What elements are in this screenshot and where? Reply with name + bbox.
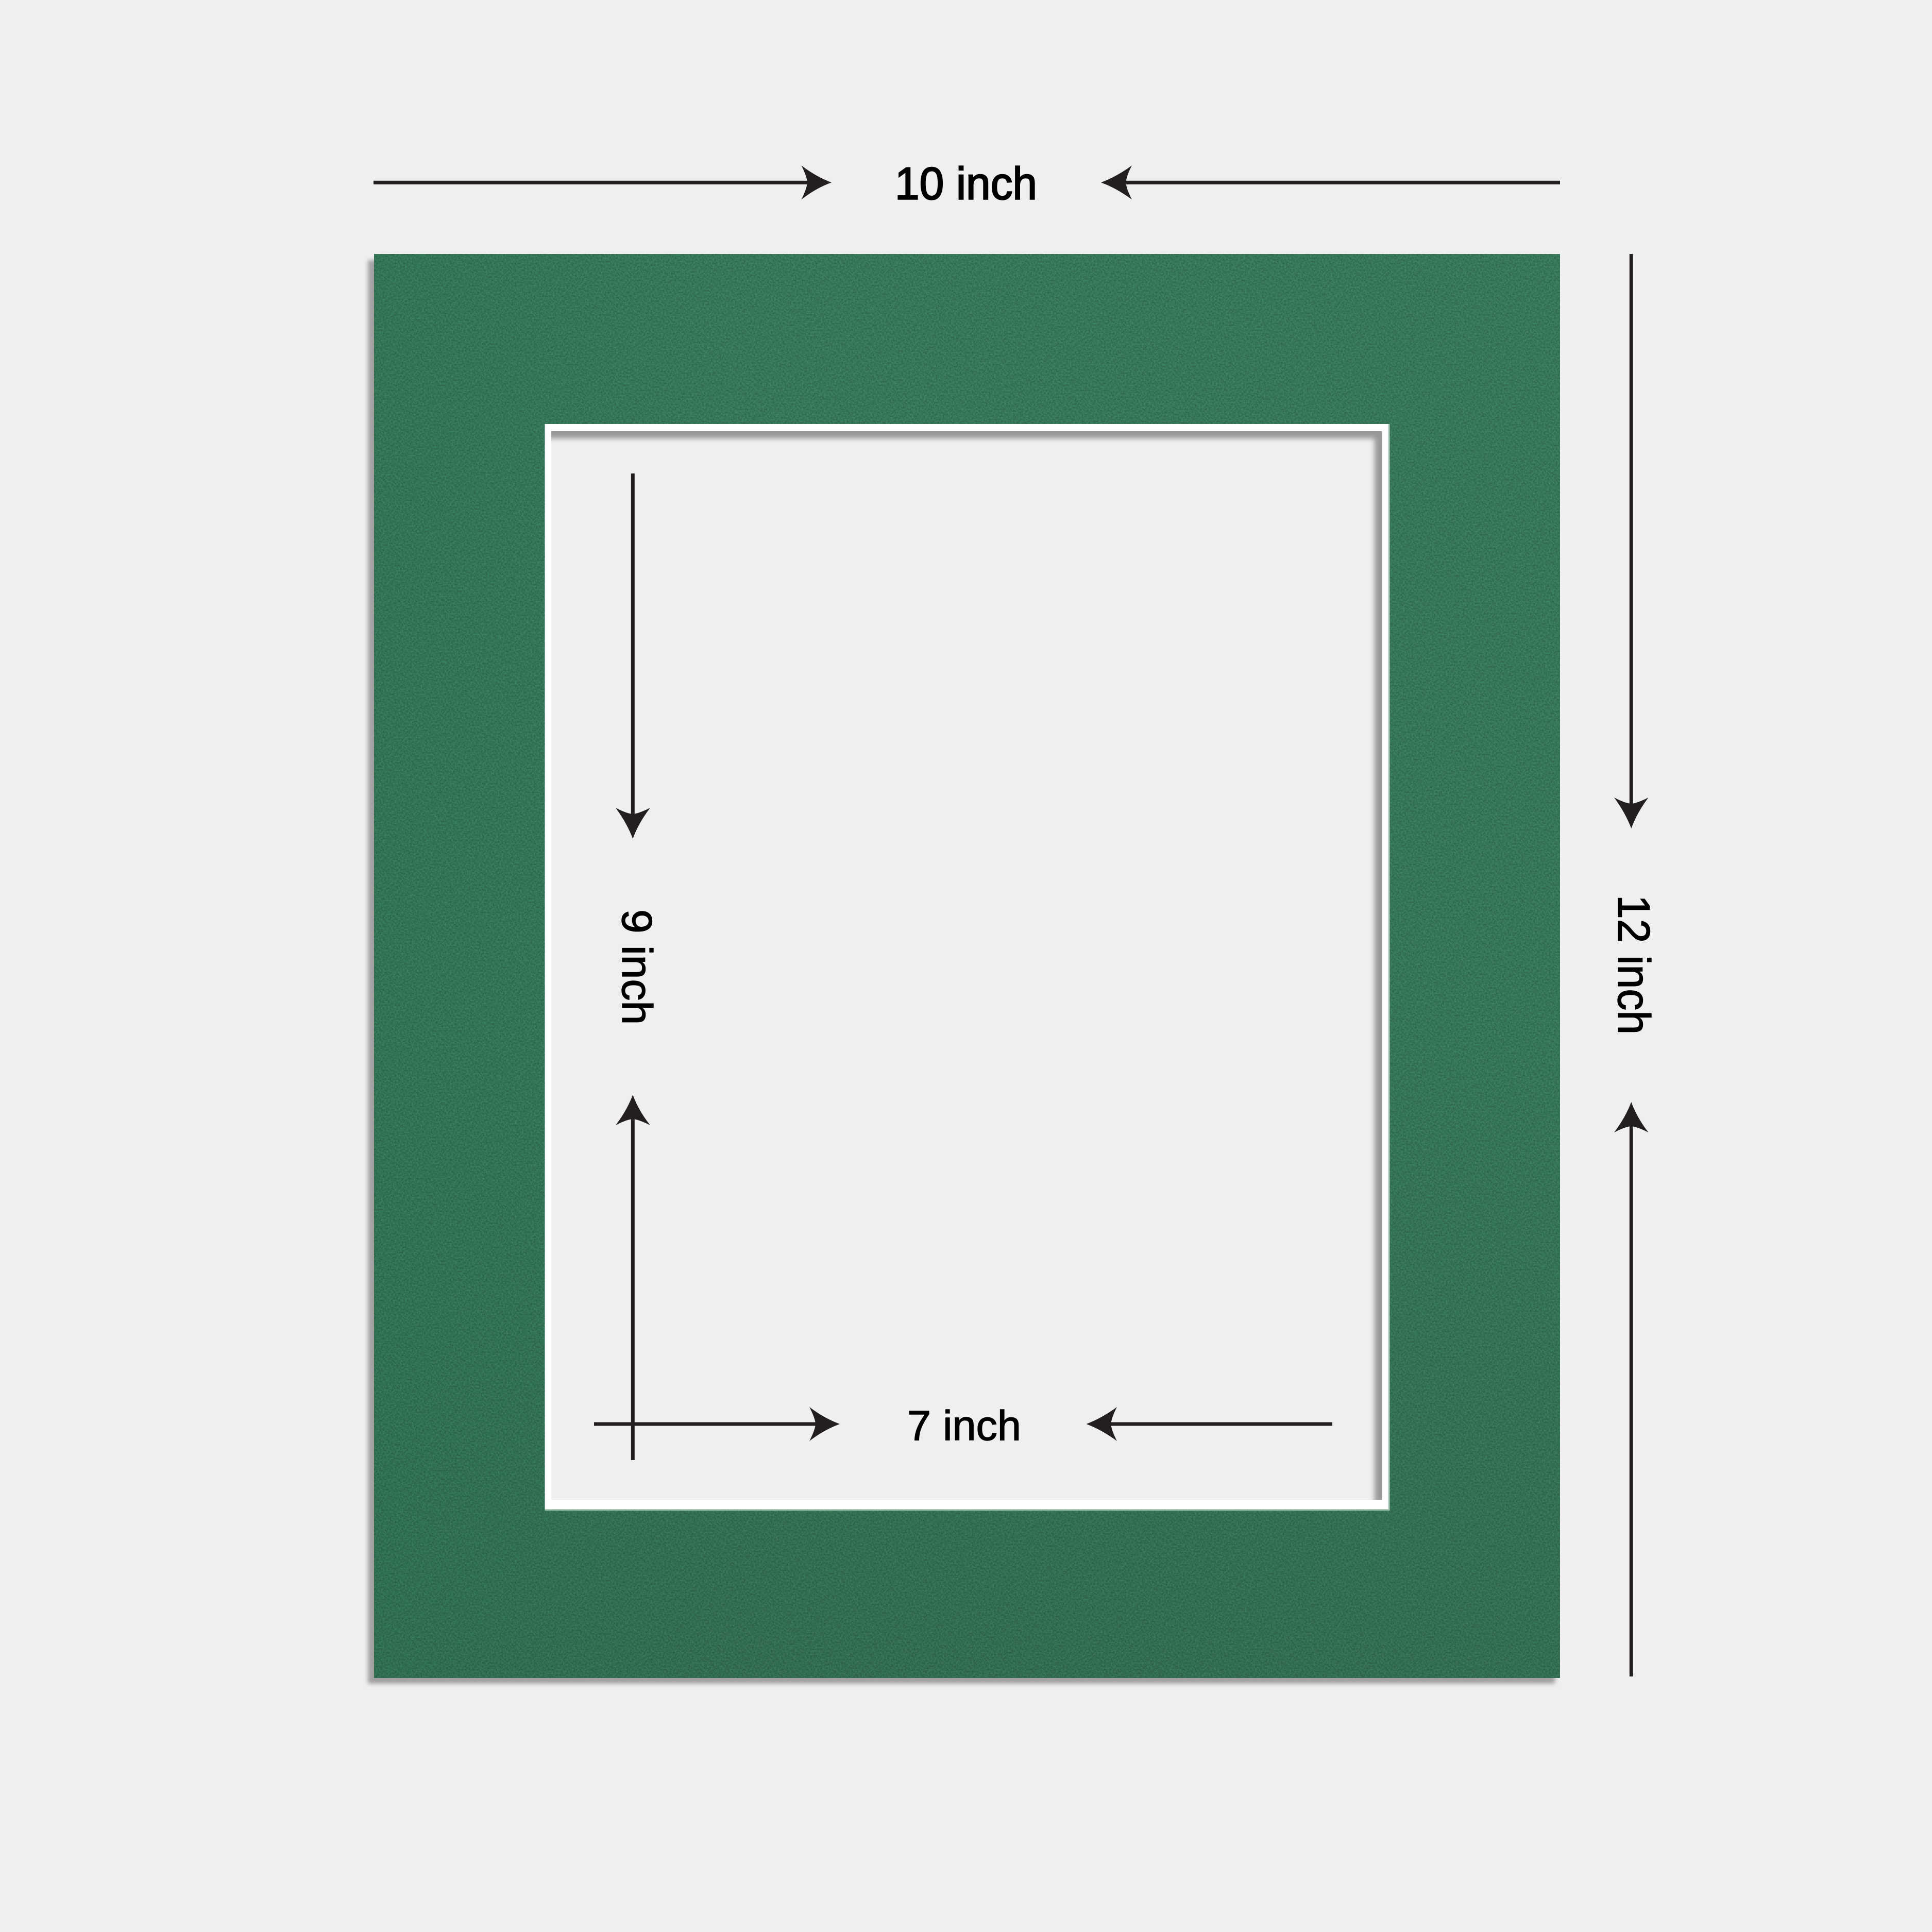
arrow: right side pointing up — [1614, 1102, 1649, 1676]
arrow: right side pointing down — [1614, 254, 1649, 828]
dimension: window height 9 inch — [613, 473, 661, 1460]
label: 9 inch: 9 inch — [613, 909, 661, 1025]
arrow: inner bottom pointing right — [594, 1407, 840, 1441]
arrow: inner bottom pointing left — [1086, 1407, 1332, 1441]
dimension: mat width 10 inch — [374, 158, 1560, 209]
dimension: mat height 12 inch — [1608, 254, 1659, 1676]
label: 10 inch: 10 inch — [895, 158, 1037, 209]
green mat panel — [374, 254, 1560, 1678]
mat board — [368, 254, 1560, 1684]
arrow: inner left pointing down — [616, 473, 650, 839]
infographic canvas — [365, 165, 1652, 1686]
dimension: window width 7 inch — [594, 1402, 1332, 1449]
label: 7 inch: 7 inch — [907, 1402, 1021, 1449]
arrow: top right pointing left — [1101, 165, 1560, 199]
label: 12 inch: 12 inch — [1608, 895, 1659, 1035]
arrow: inner left pointing up — [616, 1095, 650, 1460]
mat drop shadow — [368, 260, 1555, 1684]
window opening with white bevel — [545, 424, 1390, 1511]
arrow: top left pointing right — [374, 165, 832, 199]
